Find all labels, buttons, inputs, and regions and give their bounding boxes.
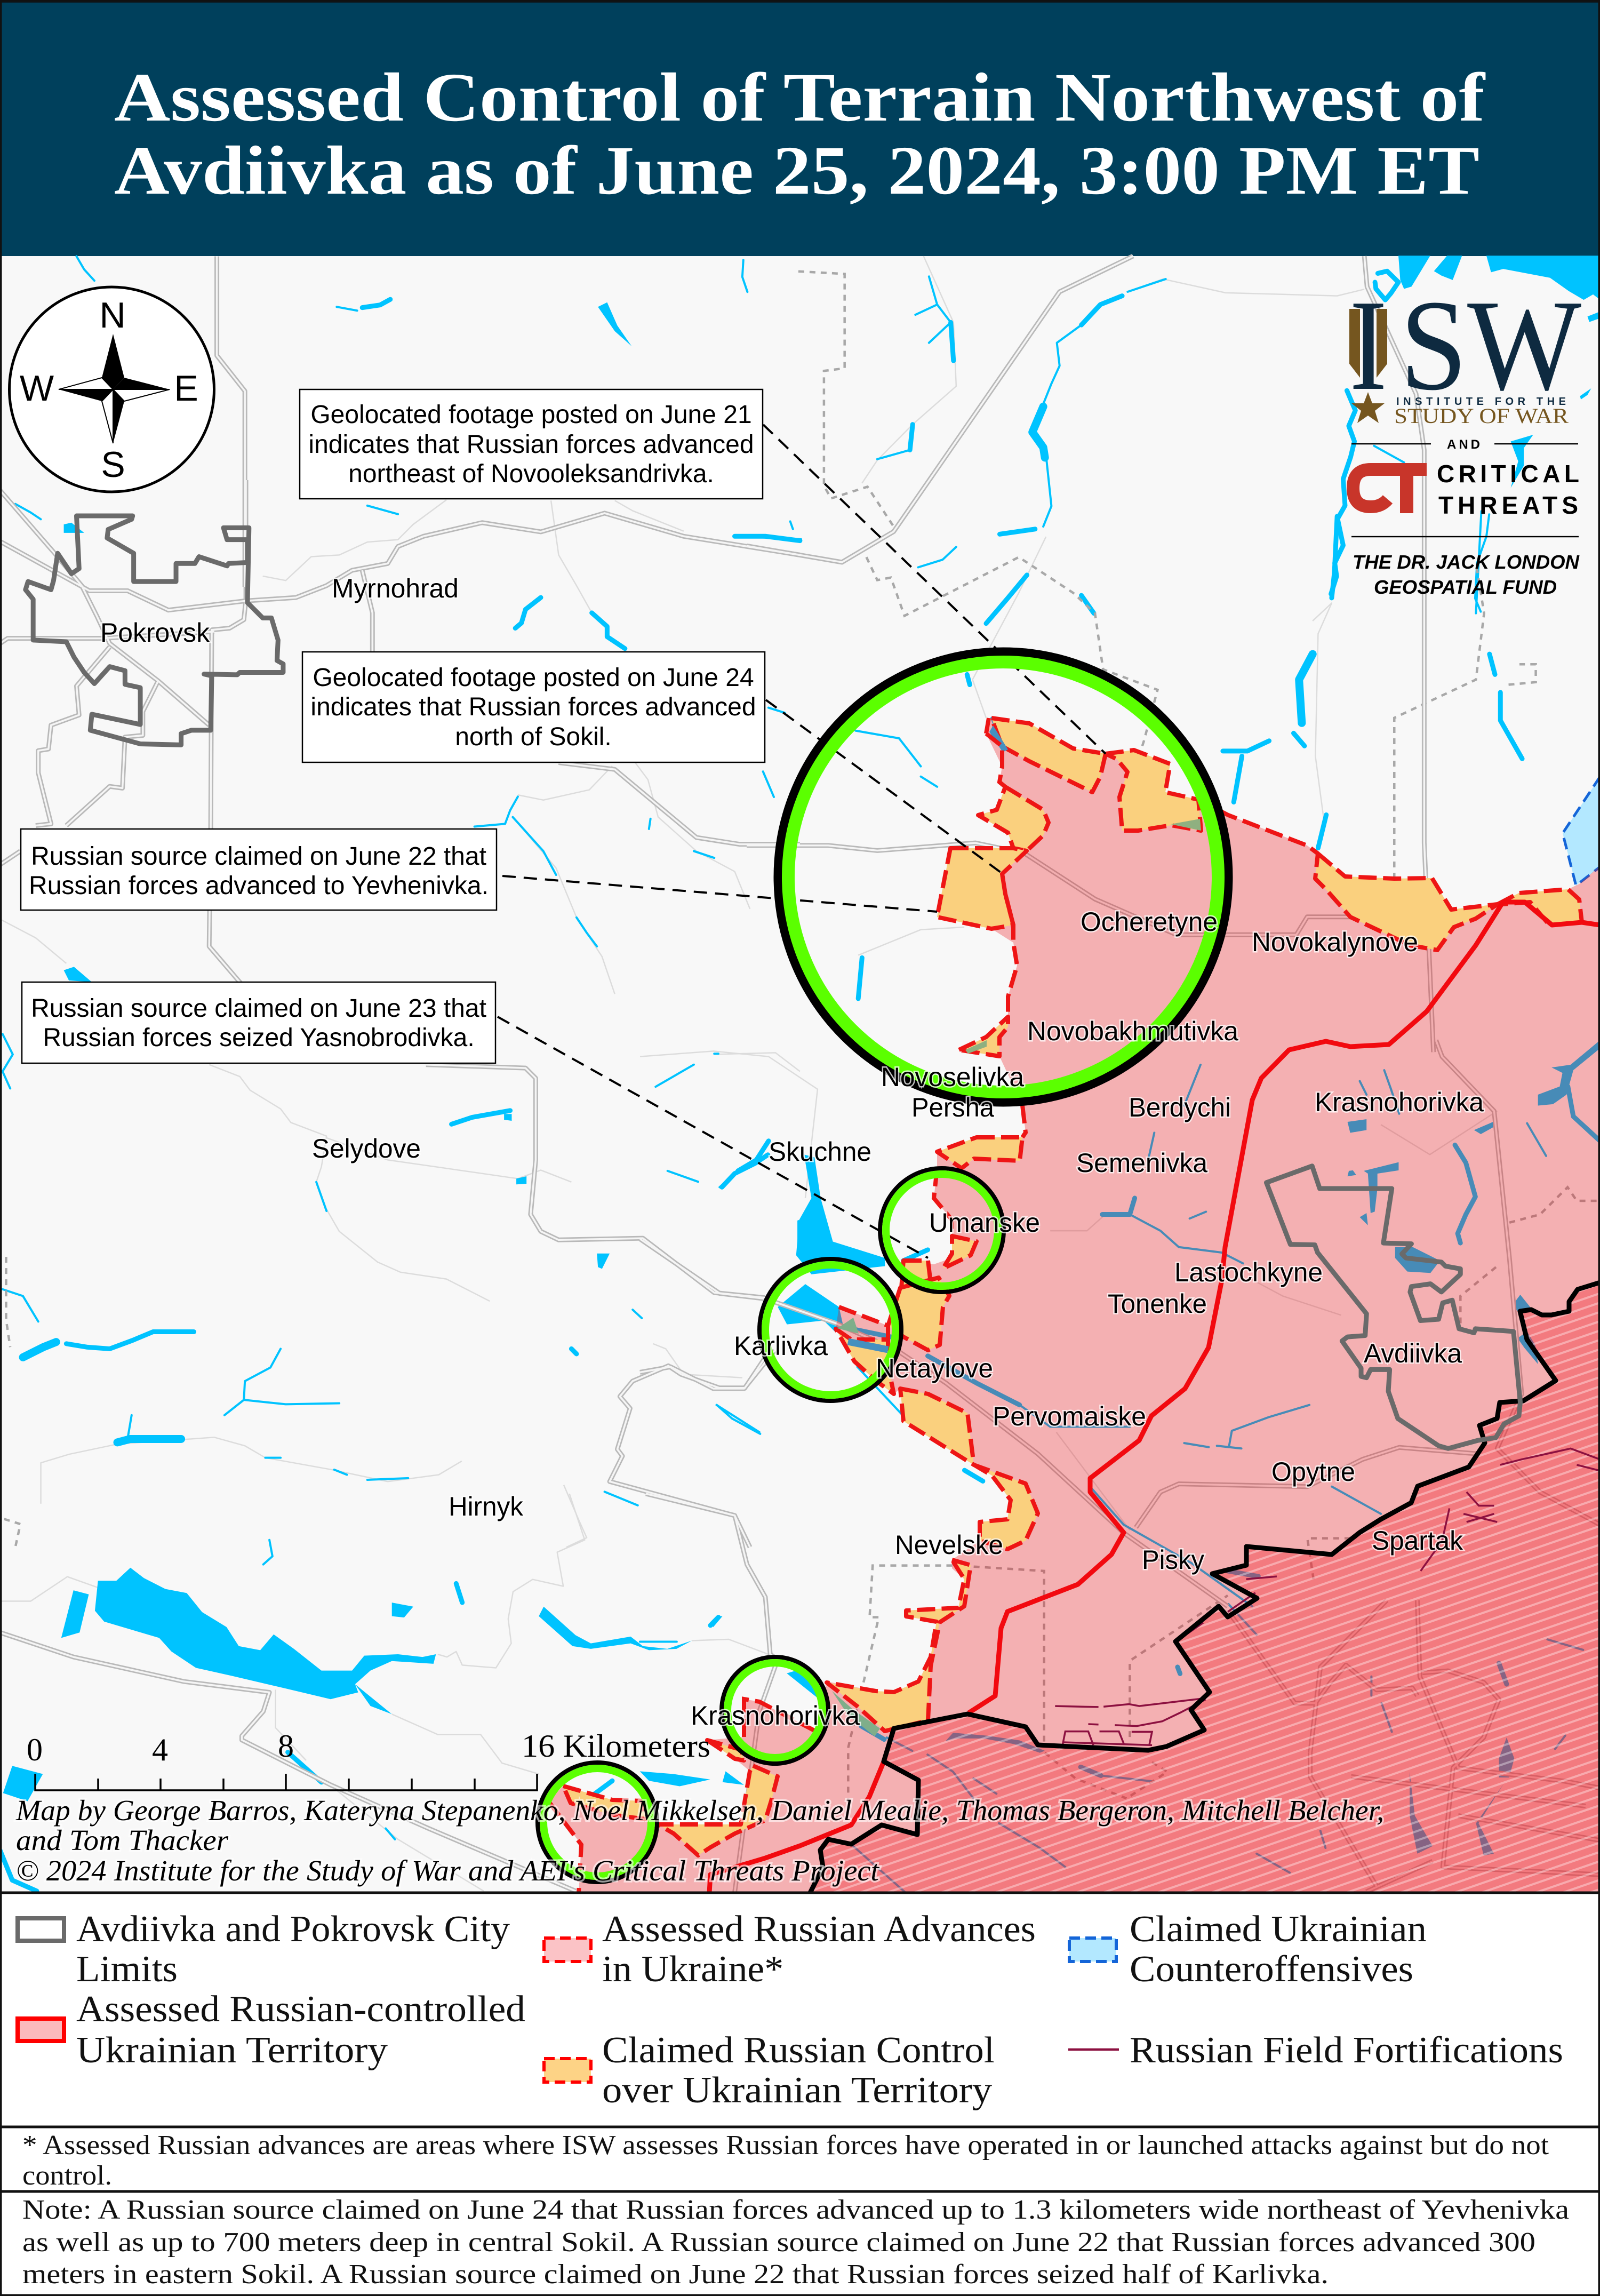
legend: Russian-controlled [18, 1989, 525, 2071]
legend: city limits [18, 1909, 510, 1990]
ISW and Critical Threats logo: SW [1400, 273, 1581, 417]
Pokrovsk city limits [26, 516, 283, 745]
map credits: Map by George Barros, Kateryna Stepanenko, Noel Mikkelsen, Daniel Mealie, Thomas Bergeron, Mitchell Belcher, [15, 1794, 1384, 1827]
legend panel [0, 1893, 1600, 2127]
title: Avdiivka as of June 25, 2024, 3:00 PM ET [114, 132, 1479, 209]
streams (dry beds) [0, 256, 1497, 1891]
settlement labels: Novokalynove [1252, 927, 1418, 957]
scale bar: 0 [27, 1732, 43, 1767]
solid red line: assessed Russian control prior to advances [969, 902, 1600, 1713]
settlement labels: Tonenke [1108, 1289, 1207, 1319]
ISW and Critical Threats logo [1349, 273, 1581, 598]
claimed Russian control areas [563, 718, 1582, 1855]
legend: Ukrainian counteroffensives [1069, 1909, 1427, 1990]
assessed Russian advances pockets outline [548, 718, 1318, 1893]
callout: June 23 [22, 982, 495, 1063]
black line: pre-invasion control boundary [810, 1282, 1600, 1893]
ISW and Critical Threats logo: CRITICAL [1437, 460, 1579, 488]
compass rose [10, 287, 214, 492]
highlight circle: Umanske [880, 1168, 1004, 1292]
scale bar: 8 [278, 1728, 294, 1764]
scale bar: 16 Kilometers [522, 1728, 710, 1764]
settlement labels: Karlivka [734, 1331, 828, 1361]
compass rose: W [20, 368, 54, 409]
settlement labels: Krasnohorivka [691, 1701, 860, 1731]
legend: Russian advances [544, 1909, 1036, 1990]
footnote: * Assessed Russian advances are areas where ISW assesses Russian forces have operated in or launched attacks against but do not [22, 2130, 1549, 2161]
settlement labels: Hirnyk [449, 1492, 524, 1521]
map credits: © 2024 Institute for the Study of War and AEI's Critical Threats Project [16, 1854, 880, 1887]
callout: June 21: Geolocated footage posted on June 21 [310, 401, 752, 429]
footnote: control. [22, 2161, 112, 2191]
settlement labels: Semenivka [1076, 1148, 1207, 1178]
callout: June 22: Russian source claimed on June 22 that [31, 842, 486, 871]
legend: Russian-controlled: Assessed Russian-controlled [76, 1989, 525, 2030]
ISW and Critical Threats logo: STUDY OF WAR [1394, 404, 1569, 428]
header banner [0, 0, 1600, 256]
callout: June 23: Russian forces seized Yasnobrodivka. [43, 1024, 475, 1052]
highlight circle: Krasnohorivka [722, 1657, 828, 1764]
note: Note: A Russian source claimed on June 24 that Russian forces advanced up to 1.3 kilometers wide northeast of Yevhenivka [22, 2195, 1569, 2225]
settlement labels: Myrnohrad [332, 573, 459, 603]
highlight circle: Ocheretyne sector [778, 652, 1228, 1102]
highlight circle: southern sector [538, 1763, 657, 1882]
legend: Ukrainian counteroffensives: Counteroffensives [1130, 1949, 1413, 1990]
callout: June 24 [302, 652, 765, 762]
legend: city limits: Limits [76, 1949, 178, 1990]
settlement labels: Skuchne [769, 1137, 871, 1167]
settlement labels: Selydove [312, 1134, 421, 1163]
Avdiivka city limits [1266, 1166, 1521, 1448]
legend: city limits: Avdiivka and Pokrovsk City [76, 1909, 510, 1950]
scale bar [27, 1728, 710, 1790]
callout: June 23: Russian source claimed on June 23 that [31, 994, 486, 1023]
legend: Ukrainian counteroffensives: Claimed Ukrainian [1130, 1909, 1427, 1950]
callout: June 21: indicates that Russian forces advanced [308, 430, 754, 459]
settlement labels: Pisky [1142, 1545, 1204, 1575]
callout: June 24: indicates that Russian forces advanced [310, 693, 756, 721]
footnote [0, 2127, 1600, 2191]
legend: claimed Russian control: Claimed Russian Control [602, 2030, 995, 2071]
settlement labels: Persha [911, 1093, 994, 1122]
ISW and Critical Threats logo: THREATS [1438, 491, 1578, 519]
settlement labels: Netaylove [876, 1353, 993, 1383]
river and lake water [0, 256, 1600, 1892]
compass rose: E [174, 368, 198, 409]
settlement labels: Nevelske [895, 1530, 1003, 1560]
legend: Russian advances: in Ukraine* [602, 1949, 783, 1990]
legend: claimed Russian control [544, 2030, 995, 2111]
note: meters in eastern Sokil. A Russian source claimed on June 22 that Russian forces seized half of Karlivka. [22, 2259, 1329, 2290]
settlement labels: Opytne [1271, 1457, 1355, 1487]
oblast dotted boundaries [4, 272, 1600, 1803]
callout: June 24: north of Sokil. [455, 723, 612, 751]
ISW and Critical Threats logo: THE DR. JACK LONDON [1353, 551, 1580, 573]
compass rose: S [101, 444, 125, 485]
settlement labels: Spartak [1372, 1526, 1463, 1556]
settlement labels [100, 573, 1484, 1731]
legend: Russian-controlled: Ukrainian Territory [76, 2030, 388, 2071]
settlement labels: Pokrovsk [100, 618, 210, 648]
scale bar: 4 [152, 1732, 168, 1767]
ISW and Critical Threats logo: AND [1447, 437, 1480, 452]
settlement labels: Pervomaiske [993, 1401, 1146, 1431]
map base [0, 256, 1600, 1893]
highlight circle: Karlivka [759, 1259, 901, 1401]
settlement labels: Lastochkyne [1174, 1257, 1323, 1287]
settlement labels: Novoselivka [881, 1062, 1024, 1092]
assessed Russian-controlled territory [548, 718, 1600, 1893]
ISW and Critical Threats logo: GEOSPATIAL FUND [1374, 576, 1557, 598]
legend: field fortifications: Russian Field Fortifications [1130, 2030, 1563, 2071]
settlement labels: Ocheretyne [1081, 907, 1218, 937]
roads [0, 256, 1600, 1892]
hatched zone: Russian-controlled before the 2022 invasion [810, 1282, 1600, 1893]
compass rose: N [99, 295, 126, 336]
note: as well as up to 700 meters deep in central Sokil. A Russian source claimed on June 22 that Russian forces advanced 300 [22, 2227, 1535, 2258]
settlement labels: Avdiivka [1364, 1338, 1462, 1368]
note [0, 2191, 1600, 2296]
legend: Russian advances: Assessed Russian Advances [602, 1909, 1036, 1950]
settlement labels: Berdychi [1129, 1093, 1231, 1122]
callout: June 24: Geolocated footage posted on June 24 [313, 664, 754, 692]
settlement labels: Umanske [929, 1208, 1040, 1238]
ISW and Critical Threats logo: INSTITUTE FOR THE [1396, 396, 1566, 408]
claimed Ukrainian counteroffensive area [1563, 777, 1600, 886]
callout: June 22: Russian forces advanced to Yevhenivka. [29, 872, 489, 900]
callout: June 21 [300, 389, 763, 499]
callout: June 21: northeast of Novooleksandrivka. [348, 460, 714, 488]
settlement labels: Novobakhmutivka [1027, 1016, 1238, 1046]
title [114, 59, 1486, 209]
settlement labels: Krasnohorivka [1315, 1087, 1484, 1117]
callout leader lines [498, 425, 1106, 1258]
ISW and Critical Threats logo: I [1349, 273, 1387, 417]
callout: June 22 [21, 829, 497, 910]
title: Assessed Control of Terrain Northwest of [114, 59, 1486, 136]
legend: claimed Russian control: over Ukrainian Territory [602, 2070, 992, 2111]
Russian field fortifications [1055, 1448, 1600, 1745]
map credits: and Tom Thacker [16, 1824, 229, 1856]
map credits [15, 1794, 1384, 1887]
